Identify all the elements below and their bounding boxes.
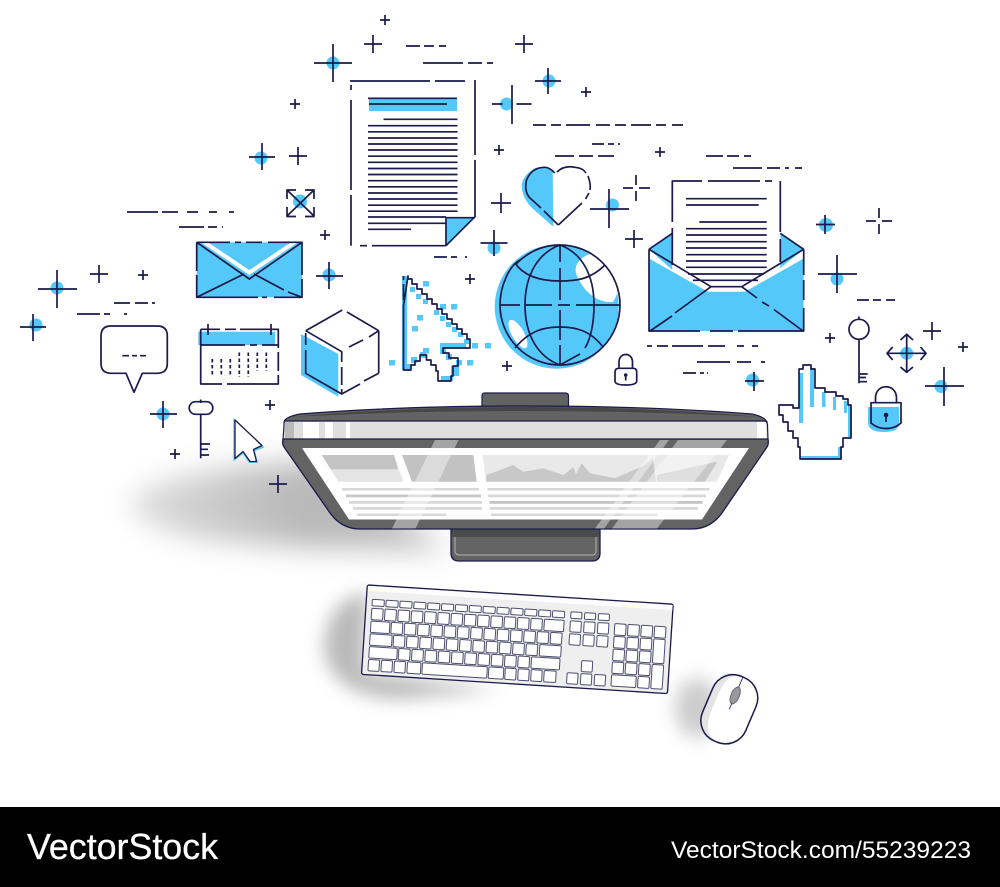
key icon right bbox=[849, 316, 869, 383]
cube lines bbox=[306, 310, 379, 394]
screen panel left bbox=[322, 455, 403, 482]
mouse body fill bbox=[694, 668, 765, 751]
shift row bbox=[369, 647, 560, 670]
globe highlights bbox=[505, 254, 618, 351]
monitor bbox=[283, 393, 768, 561]
padlock outline bbox=[871, 387, 901, 428]
cursor outline bbox=[404, 276, 470, 381]
padlock blue icon bbox=[868, 387, 901, 432]
calendar frame bbox=[201, 324, 278, 384]
number row bbox=[371, 608, 564, 632]
monitor screen bbox=[302, 448, 749, 520]
shadow: monitor bbox=[130, 462, 450, 550]
monitor bezel bbox=[283, 439, 768, 529]
globe icon bbox=[495, 245, 620, 369]
closed envelope icon bbox=[197, 240, 302, 297]
keyboard bbox=[362, 585, 673, 694]
screen reflections bbox=[392, 440, 727, 528]
home row bbox=[370, 634, 561, 657]
speech bubble icon bbox=[101, 326, 167, 392]
heart fill bbox=[522, 167, 553, 227]
mouse side shade bbox=[694, 668, 742, 741]
footer bar bbox=[0, 807, 1000, 887]
padlock small icon bbox=[615, 354, 637, 385]
sparkle bbox=[316, 262, 343, 289]
padlock fill bbox=[868, 407, 899, 432]
pixel hand cursor icon bbox=[779, 365, 852, 460]
mouse bbox=[694, 668, 765, 751]
sparkle bbox=[38, 270, 77, 308]
monitor light strip bbox=[283, 421, 768, 440]
hand blue shading bbox=[799, 368, 852, 460]
pixel arrow cursor icon bbox=[389, 276, 491, 381]
cube blue face bbox=[301, 334, 338, 397]
heart outline bbox=[526, 167, 590, 225]
monitor neck bbox=[451, 528, 600, 561]
footer url: VectorStock.com/55239223 bbox=[671, 837, 971, 864]
open envelope icon bbox=[649, 181, 804, 331]
document header bbox=[369, 98, 457, 111]
envelope body bbox=[197, 242, 302, 297]
expand icon bbox=[287, 190, 314, 216]
screen panel right bbox=[483, 455, 729, 482]
expand dot bbox=[293, 194, 307, 208]
monitor stand top bbox=[482, 393, 568, 407]
function row bbox=[372, 599, 565, 618]
globe fill bbox=[495, 245, 619, 369]
envelope lines bbox=[649, 233, 804, 331]
envelope white flap bbox=[201, 240, 298, 272]
sparkle bbox=[314, 44, 352, 82]
document fold bbox=[446, 218, 474, 245]
document text lines bbox=[368, 119, 458, 229]
bottom row bbox=[368, 659, 556, 683]
envelope outline bbox=[197, 242, 302, 297]
hand outline bbox=[779, 365, 851, 459]
cursor pixels bbox=[389, 281, 491, 381]
calendar band bbox=[198, 332, 275, 345]
screen text lines bbox=[342, 488, 710, 516]
sparkle bbox=[492, 85, 532, 124]
bubble dashes bbox=[122, 355, 146, 357]
sparkle bbox=[590, 189, 629, 228]
letter lines bbox=[686, 199, 767, 280]
footer brand: VectorStock bbox=[27, 826, 219, 867]
cube icon bbox=[301, 310, 379, 397]
globe lines bbox=[500, 245, 620, 365]
sparkle bbox=[20, 314, 46, 341]
plain crosses bbox=[90, 15, 968, 493]
screen chart bbox=[486, 459, 717, 482]
sparkle bbox=[535, 68, 561, 94]
sparkle bbox=[745, 372, 764, 391]
heart icon bbox=[522, 167, 590, 227]
cursor outline bbox=[235, 420, 262, 462]
numeric keypad bbox=[611, 624, 666, 689]
sparkle bbox=[249, 143, 275, 170]
key icon left bbox=[189, 400, 213, 458]
hollow crosses bbox=[623, 175, 892, 234]
move arrows icon bbox=[887, 334, 926, 372]
shadow: keyboard bbox=[324, 592, 500, 699]
calendar icon bbox=[198, 324, 278, 384]
mouse wheel bbox=[728, 686, 743, 705]
shadow: mouse bbox=[675, 678, 719, 738]
letter bbox=[672, 181, 780, 287]
sparkle bbox=[818, 255, 857, 293]
qwerty row bbox=[370, 621, 562, 644]
dashed lines bbox=[77, 46, 895, 373]
envelope front bbox=[649, 258, 804, 331]
sparkle bbox=[480, 230, 508, 256]
calendar dots bbox=[212, 352, 266, 377]
sparkle bbox=[150, 401, 177, 428]
small arrow cursor icon bbox=[233, 418, 264, 463]
envelope back flaps bbox=[649, 233, 804, 270]
cursor blue shade bbox=[233, 418, 264, 463]
mouse outline bbox=[694, 668, 765, 751]
keyboard case bbox=[362, 585, 673, 694]
document icon bbox=[350, 80, 475, 246]
sparkle bbox=[925, 367, 964, 406]
sparkles with dots bbox=[20, 44, 964, 428]
sparkle bbox=[816, 215, 835, 234]
move dot bbox=[900, 347, 913, 360]
cursor blue band bbox=[402, 276, 407, 370]
screen panel middle bbox=[402, 455, 477, 482]
monitor back top bbox=[284, 406, 767, 422]
navigation cluster bbox=[566, 612, 610, 686]
